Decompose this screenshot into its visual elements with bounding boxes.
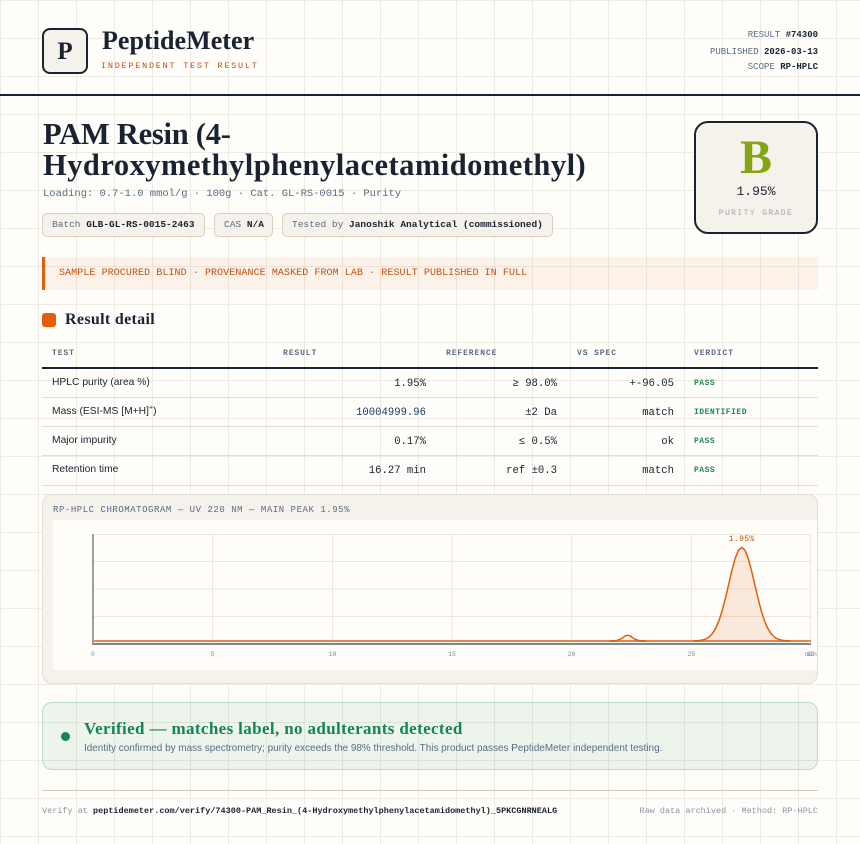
- section title: Result detail: [65, 311, 155, 328]
- chart caption: RP-HPLC CHROMATOGRAM — UV 220 NM — MAIN PEAK 1.95%: [53, 505, 350, 515]
- grade caption: PURITY GRADE: [719, 209, 793, 218]
- result metadata: PUBLISHED 2026-03-13: [710, 46, 818, 56]
- column header: test: TEST: [52, 349, 75, 358]
- chromatogram chart: [91, 534, 817, 658]
- row: major impurity: ok: [661, 436, 674, 448]
- product title: Hydroxymethylphenylacetamidomethyl): [43, 148, 586, 182]
- row: retention time: ref ±0.3: [506, 465, 557, 477]
- x axis labels: 10: [329, 651, 336, 658]
- status dot: [61, 732, 70, 741]
- result metadata: RESULT #74300: [748, 30, 818, 40]
- signal trace: [610, 547, 790, 641]
- baseline trace: [93, 640, 811, 642]
- pill: CAS: [214, 213, 273, 237]
- verified callout: [42, 702, 818, 770]
- row: mass: 10004999.96: [356, 407, 426, 419]
- row: retention time: [52, 464, 715, 477]
- chromatogram card: [42, 494, 818, 684]
- row: major impurity: ≤ 0.5%: [519, 436, 557, 448]
- logo mark: [42, 28, 88, 74]
- column header: result: RESULT: [283, 349, 317, 358]
- pill: batch: [42, 213, 205, 237]
- axes: [92, 534, 811, 645]
- grade letter: B: [740, 131, 772, 184]
- product title: PAM Resin (4-: [43, 116, 231, 150]
- row: mass: [52, 405, 747, 419]
- row: HPLC purity: PASS: [694, 378, 715, 388]
- x axis labels: 25: [688, 651, 695, 658]
- column header: reference: REFERENCE: [446, 349, 497, 358]
- brand name: PeptideMeter: [102, 26, 254, 55]
- section heading: result detail: [42, 311, 155, 328]
- header: [0, 0, 860, 96]
- row: HPLC purity: [52, 377, 715, 390]
- row: major impurity: Major impurity: [52, 435, 117, 446]
- blind sample banner: [42, 257, 818, 290]
- row: HPLC purity: HPLC purity (area %): [52, 377, 150, 388]
- method note: Raw data archived · Method: RP-HPLC: [639, 806, 818, 816]
- product subtitle: Loading: 0.7-1.0 mmol/g · 100g · Cat. GL-RS-0015 · Purity: [43, 188, 401, 200]
- pill: tested by: Tested by Janoshik Analytical (commissioned): [292, 219, 543, 230]
- row: HPLC purity: 1.95%: [394, 378, 426, 390]
- row: retention time: 16.27 min: [369, 465, 426, 477]
- blind sample banner: SAMPLE PROCURED BLIND · PROVENANCE MASKED FROM LAB · RESULT PUBLISHED IN FULL: [59, 268, 527, 279]
- chart panel background: [53, 520, 819, 670]
- result metadata: [710, 30, 818, 72]
- product title: [43, 116, 586, 182]
- row: retention time: Retention time: [52, 464, 118, 475]
- x axis labels: [91, 651, 817, 658]
- x axis labels: min: [805, 651, 817, 658]
- peak label: 1.95%: [729, 535, 755, 544]
- main peak fill: [696, 547, 787, 641]
- x axis labels: 30: [807, 651, 815, 658]
- section marker: [42, 313, 56, 327]
- row: major impurity: [52, 435, 715, 448]
- pill: tested by: [282, 213, 553, 237]
- row: mass: Mass (ESI-MS [M+H]+): [52, 405, 157, 417]
- results table: [42, 349, 818, 486]
- column header: vs spec: VS SPEC: [577, 349, 617, 358]
- footer: [42, 790, 818, 820]
- row: retention time: PASS: [694, 466, 715, 474]
- x axis labels: 0: [91, 651, 95, 658]
- verdict explanation: Identity confirmed by mass spectrometry; purity exceeds the 98% threshold. This product passes PeptideMeter independent testing.: [84, 742, 662, 754]
- row: mass: IDENTIFIED: [694, 408, 747, 416]
- row: HPLC purity: +-96.05: [629, 378, 674, 390]
- x axis labels: 20: [568, 651, 576, 658]
- verify link: Verify at peptidemeter.com/verify/74300-PAM_Resin_(4-Hydroxymethylphenylacetamidomethyl)_5PKCGNRNEALG: [42, 806, 557, 816]
- pill: batch: Batch GLB-GL-RS-0015-2463: [52, 219, 195, 230]
- row: retention time: match: [642, 465, 674, 477]
- result metadata: SCOPE RP-HPLC: [748, 62, 818, 72]
- column header: verdict: VERDICT: [694, 349, 734, 358]
- x axis labels: 5: [211, 651, 215, 658]
- row: mass: match: [642, 407, 674, 419]
- row: major impurity: 0.17%: [394, 436, 426, 448]
- row: HPLC purity: ≥ 98.0%: [512, 378, 557, 390]
- grade card: [694, 121, 818, 234]
- brand tagline: INDEPENDENT TEST RESULT: [101, 60, 259, 70]
- purity value: 1.95%: [736, 184, 776, 199]
- logo mark: P: [57, 38, 73, 65]
- x axis labels: 15: [448, 651, 456, 658]
- row: major impurity: PASS: [694, 436, 715, 446]
- verdict heading: Verified — matches label, no adulterants detected: [84, 719, 463, 738]
- pill: CAS: CAS N/A: [224, 219, 264, 230]
- row: mass: ±2 Da: [525, 407, 557, 419]
